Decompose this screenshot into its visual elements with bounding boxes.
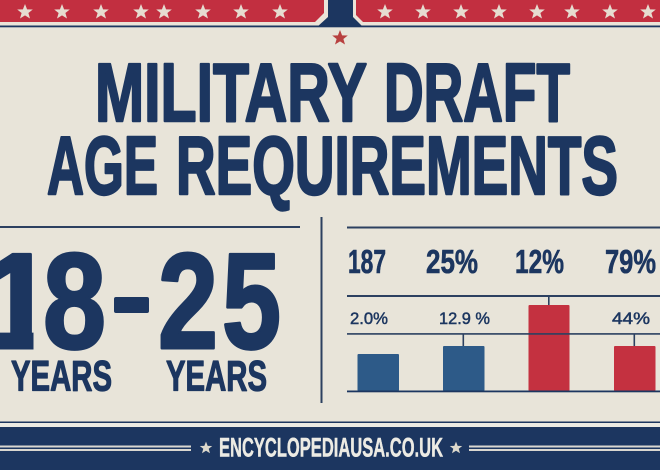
panel: age range bbox=[0, 225, 300, 400]
stat labels: 44% bbox=[612, 309, 650, 328]
years labels: YEARS bbox=[11, 352, 112, 400]
panel: statistics chart bbox=[347, 226, 660, 392]
stat labels: 12.9 % bbox=[439, 309, 490, 328]
big number 18 to 25: 8 bbox=[43, 225, 106, 377]
years labels bbox=[11, 352, 267, 400]
title: AGE bbox=[47, 119, 158, 212]
banner stars bbox=[17, 4, 656, 18]
big number 18 to 25: 5 bbox=[222, 225, 281, 377]
stat numbers: 25% bbox=[426, 243, 478, 280]
stat labels: 2.0% bbox=[350, 309, 388, 328]
years labels: YEARS bbox=[166, 352, 267, 400]
center navy column bbox=[317, 0, 363, 27]
top banner bbox=[0, 0, 660, 27]
footer stars bbox=[200, 442, 462, 453]
bar chart bbox=[358, 296, 656, 391]
big number 18 to 25: 2 bbox=[158, 225, 218, 377]
title: MILITARY bbox=[95, 46, 367, 139]
title bbox=[47, 46, 618, 212]
icon: red star bbox=[332, 30, 348, 44]
big number 18 to 25 bbox=[0, 252, 280, 351]
title: DRAFT bbox=[384, 46, 570, 139]
stat numbers: 187 bbox=[348, 243, 386, 280]
stat labels bbox=[350, 309, 650, 328]
stat numbers bbox=[348, 243, 656, 280]
footer url: ENCYCLOPEDIAUSA.CO.UK bbox=[219, 432, 443, 462]
stat numbers: 12% bbox=[515, 243, 564, 280]
footer banner bbox=[0, 422, 660, 470]
